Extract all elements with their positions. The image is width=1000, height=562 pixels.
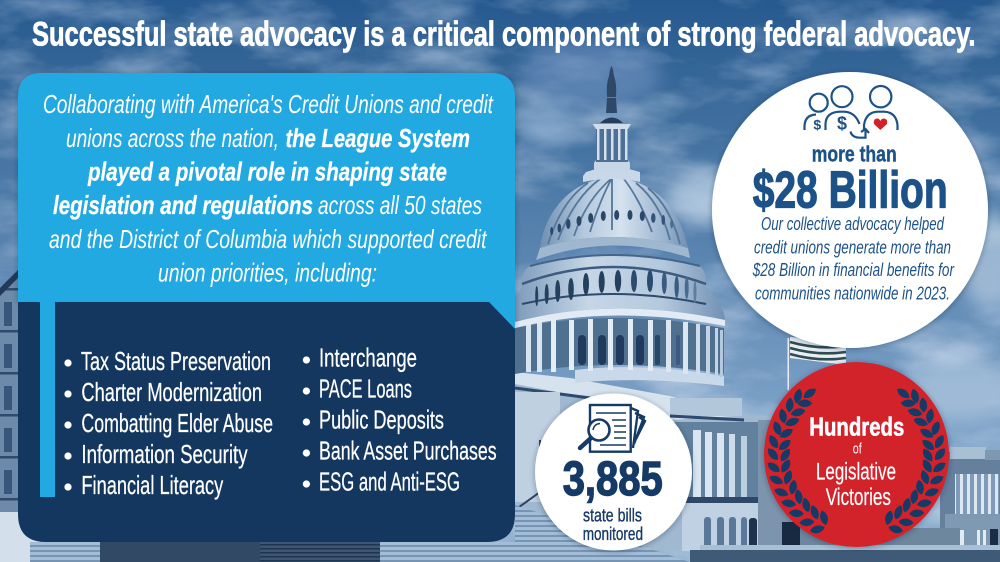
list: priorities right column: Bank Asset Purchases [319,436,497,466]
dome cupola [536,66,690,260]
list: priorities right column: Interchange [319,342,417,372]
stairs and ground [30,505,1000,562]
list: priorities left column: Charter Modernization [81,377,262,407]
list: priorities right column: PACE Loans [319,374,412,404]
intro paragraph: union priorities, including: [158,258,377,288]
icon: people with dollars and heart [804,86,898,138]
centre wing with portico [515,372,960,551]
state bills monitored [583,506,643,544]
intro paragraph: legislation and regulations [53,190,313,220]
state bills monitored: state bills [583,506,642,526]
description [752,214,955,303]
panel: light blue intro [18,73,515,329]
icon: laurel wreath left branch [765,386,830,535]
list: priorities left column: Tax Status Preservation [81,346,271,376]
Legislative Victories: Victories [826,484,891,511]
panel: dark blue priorities [18,302,515,542]
state bills monitored: monitored [583,524,643,544]
list: priorities left column: Financial Literacy [81,470,223,500]
number 3,885: 3,885 [563,453,663,506]
icon: people with dollars and heart: $ [813,116,821,132]
dome balustrade and drum [514,255,725,328]
intro paragraph [43,89,494,288]
icon: laurel wreath right branch [883,386,948,535]
list: priorities left column: Information Security [81,439,248,469]
accent bar [40,302,55,497]
left wing building [0,270,40,562]
list: priorities right column: ESG and Anti-ESG [319,466,460,496]
intro paragraph: Collaborating with America's Credit Unions and credit [43,89,494,119]
right wing building [940,447,1000,548]
Legislative Victories: Legislative [816,458,896,485]
Legislative Victories [816,458,896,511]
list: priorities right column [303,342,497,496]
list: priorities left column: Combatting Elder Abuse [81,408,273,438]
Hundreds: Hundreds [809,412,904,442]
callout: $28 Billion circle [712,72,988,348]
intro paragraph: and the District of Columbia which supported credit [49,224,488,254]
list: priorities right column: Public Deposits [319,404,444,434]
icon: documents and magnifier [580,405,645,452]
of: of [853,440,862,457]
intro paragraph: the League System [286,123,470,153]
American flag [788,337,846,390]
intro paragraph: across all 50 states [318,190,482,220]
colonnade drum [515,318,724,386]
icon: people with dollars and heart: $ [837,114,847,134]
callout: legislative victories red circle [764,362,949,547]
list: priorities left column [64,346,273,500]
callout: state bills monitored circle [535,394,692,550]
intro paragraph: unions across the nation, [66,123,279,153]
intro paragraph: played a pivotal role in shaping state [87,156,447,186]
more than: more than [812,142,897,167]
